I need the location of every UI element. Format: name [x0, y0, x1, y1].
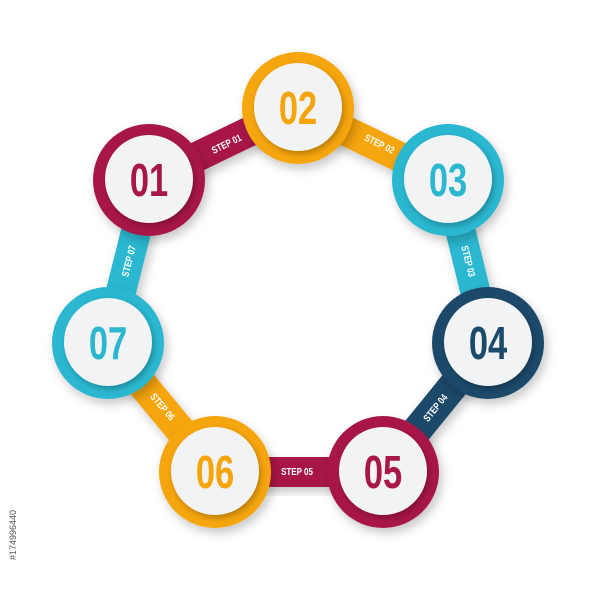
connector: step 06: STEP 06 — [148, 391, 177, 423]
connector: step 03: STEP 03 — [459, 244, 477, 278]
circle 06: 06 — [196, 446, 234, 498]
circle 06 — [159, 416, 271, 528]
circle 03: 03 — [429, 154, 467, 206]
connector: step 01 — [149, 108, 298, 180]
circle 05 — [327, 416, 439, 528]
circle 02 — [242, 52, 354, 164]
circle 03 — [392, 124, 504, 236]
connector: step 05: STEP 05 — [281, 466, 313, 477]
connector: step 01: STEP 01 — [210, 132, 243, 156]
connector: step 07: STEP 07 — [120, 244, 138, 278]
circle 04 — [432, 287, 544, 399]
circle 01: 01 — [130, 154, 168, 206]
connector: step 03 — [448, 180, 488, 343]
circle 01 — [93, 124, 205, 236]
connector: step 05 — [215, 457, 383, 487]
circle 07 — [52, 287, 164, 399]
connector: step 04: STEP 04 — [421, 392, 450, 424]
circle 05: 05 — [364, 446, 402, 498]
connector: step 06 — [108, 343, 215, 472]
connector: step 07 — [108, 180, 149, 343]
connector: step 02: STEP 02 — [363, 132, 396, 156]
circle 02: 02 — [279, 82, 317, 134]
connector: step 02 — [298, 108, 448, 180]
circle 07: 07 — [89, 317, 127, 369]
circle 04: 04 — [469, 317, 508, 369]
side id text: #174996440 — [8, 510, 18, 560]
connector: step 04 — [383, 343, 488, 472]
